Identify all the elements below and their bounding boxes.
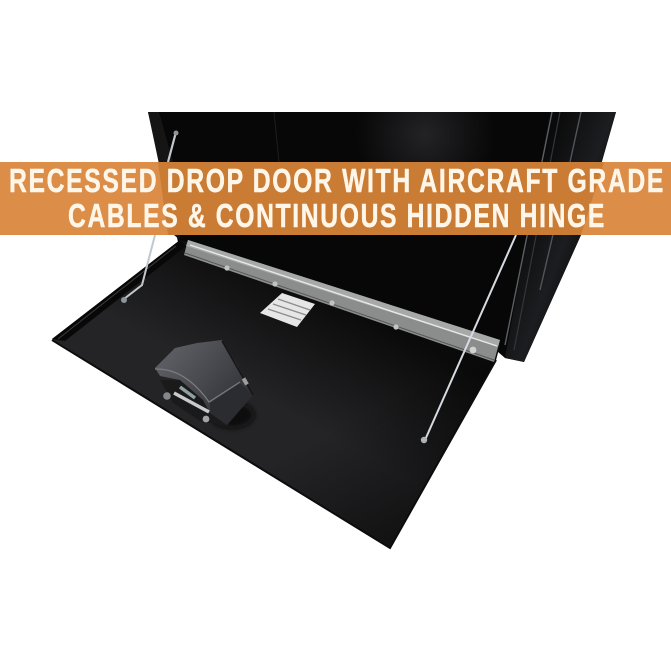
continuous hinge [184, 240, 500, 362]
left cable [121, 130, 178, 303]
warning label [260, 293, 315, 327]
door rim [52, 240, 186, 341]
toolbox body [148, 112, 616, 362]
lock puck [155, 340, 254, 428]
right cable [421, 235, 516, 443]
orange banner [0, 162, 671, 235]
drop door [52, 240, 500, 548]
banner text [9, 162, 665, 234]
